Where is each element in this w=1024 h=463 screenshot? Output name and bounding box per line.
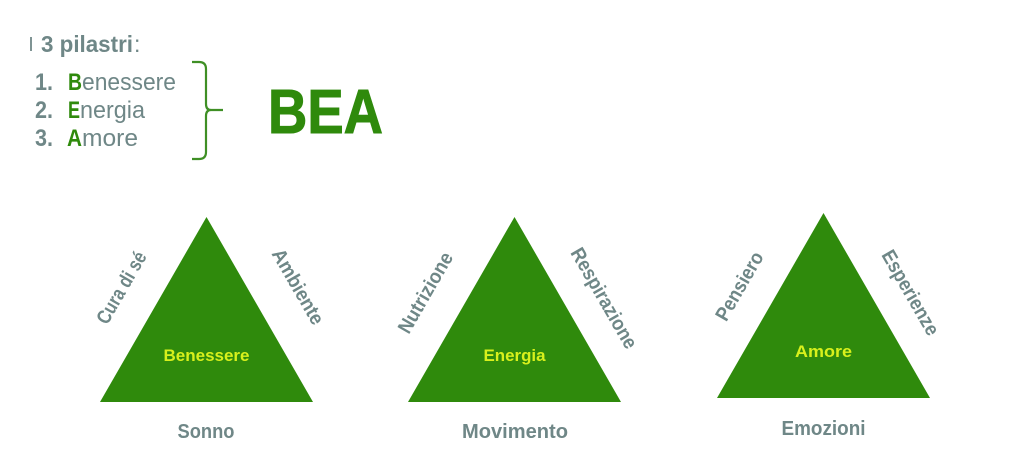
triangle: [100, 217, 313, 402]
label: Energia: Energia: [484, 346, 546, 365]
curly bracket: [192, 62, 223, 159]
bottom label: Emozioni: Emozioni: [782, 418, 866, 440]
side label: Respirazione: Respirazione: [566, 244, 641, 353]
label: Amore: Amore: [795, 342, 852, 361]
list item: Energia: 2.: [35, 97, 53, 124]
list item: Amore: more: [82, 125, 138, 152]
triangle: [408, 217, 621, 402]
label: Benessere: Benessere: [164, 346, 250, 365]
list item: Benessere: enessere: [82, 69, 176, 96]
list item: Amore: A: [67, 125, 82, 152]
heading: 3 pilastri: 3 pilastri: [41, 31, 133, 57]
list item: Benessere: [35, 69, 176, 96]
list: the three pillars: [35, 69, 176, 152]
list item: Benessere: B: [68, 69, 82, 96]
panel: Benessere triangle: [92, 217, 328, 443]
list item: Amore: [35, 125, 138, 152]
panel: Amore triangle: [711, 213, 943, 440]
list item: Amore: 3.: [35, 125, 53, 152]
side label: Esperienze: Esperienze: [877, 246, 943, 340]
bottom label: Sonno: Sonno: [178, 421, 234, 443]
triangle: [717, 213, 930, 398]
list item: Energia: nergia: [80, 97, 146, 124]
side label: Pensiero: Pensiero: [711, 248, 769, 325]
side label: Cura di sé: Cura di sé: [92, 248, 152, 328]
list item: Energia: E: [68, 97, 80, 124]
heading: 3 pilastri: :: [134, 31, 140, 57]
bottom label: Movimento: Movimento: [462, 421, 568, 443]
list item: Energia: [35, 97, 146, 124]
side label: Nutrizione: Nutrizione: [394, 249, 458, 337]
panel: Energia triangle: [394, 217, 641, 443]
side label: Ambiente: Ambiente: [267, 245, 328, 329]
list item: Benessere: 1.: [35, 69, 53, 96]
acronym: BEA: BEA: [268, 78, 383, 147]
